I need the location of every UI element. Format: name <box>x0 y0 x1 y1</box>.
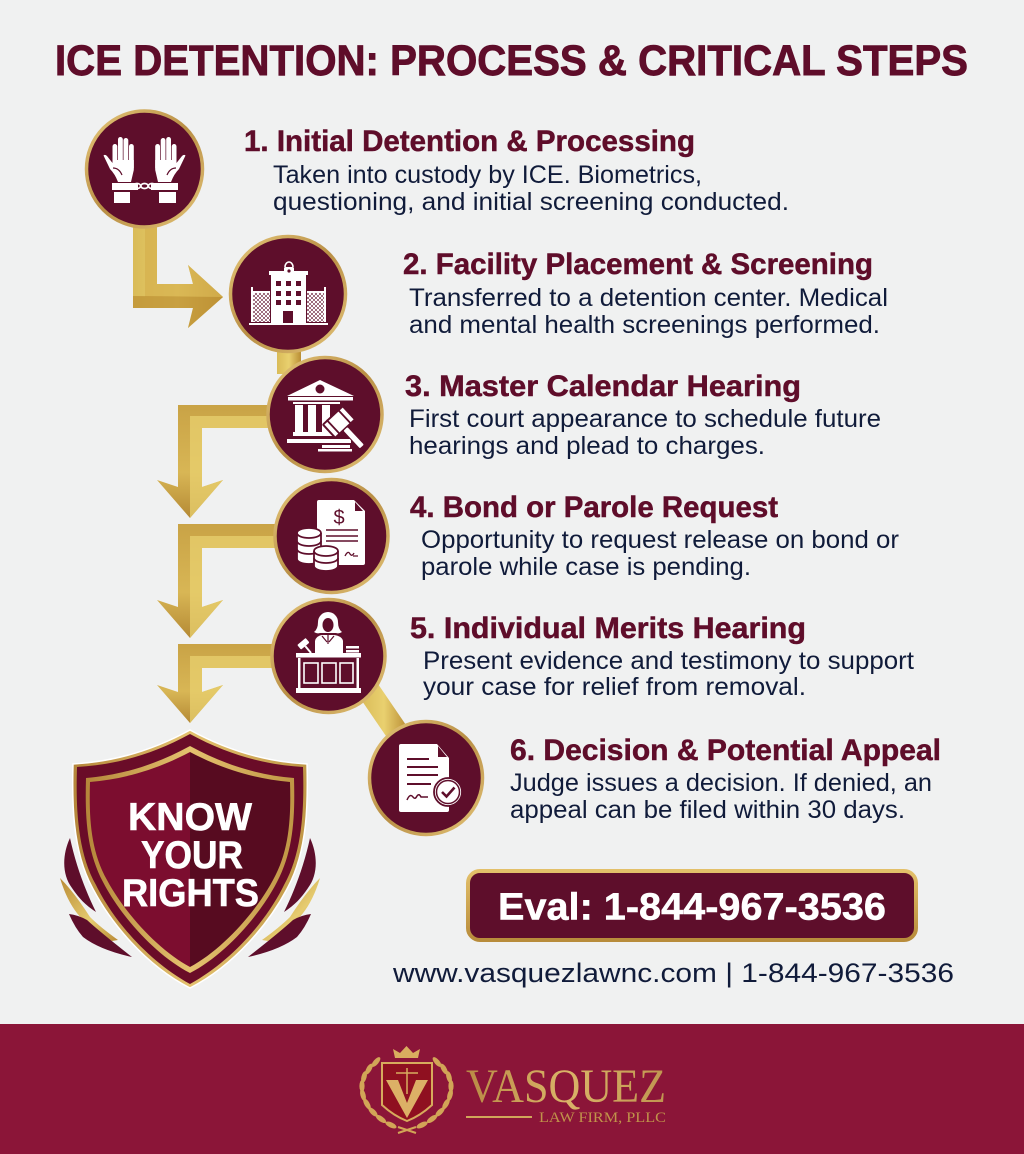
shield text: RIGHTS <box>122 872 259 915</box>
text: step 1 description: questioning, and initial screening conducted. <box>273 188 789 216</box>
shield: know your rights <box>60 730 320 988</box>
icon: judge at bench <box>272 600 385 712</box>
icon: detention facility <box>230 236 346 352</box>
logo: crest <box>359 1046 454 1133</box>
logo: wordmark: LAW FIRM, PLLC <box>539 1110 666 1126</box>
text: step 3 description: hearings and plead to charges. <box>409 432 765 460</box>
step 4 <box>275 480 899 592</box>
shield text: KNOW <box>128 796 252 839</box>
arrow: step 1 to step 2 <box>133 225 223 328</box>
step 3 <box>268 358 881 472</box>
connector: step 2 to step 3 <box>277 348 301 374</box>
icon: bond document and coins: $ <box>333 507 345 529</box>
icon: bond document and coins <box>275 480 388 592</box>
text: step 4 description: Opportunity to request release on bond or <box>421 526 899 554</box>
phone button: Eval: 1-844-967-3536 <box>498 886 886 928</box>
step 2 <box>230 236 888 352</box>
text: step 5 description <box>423 647 914 701</box>
step 6 <box>370 722 941 834</box>
arrow: step 3 branch <box>157 405 272 518</box>
step 5 <box>272 600 914 712</box>
text: step 3 description <box>409 405 881 460</box>
shield text: YOUR <box>141 834 243 877</box>
icon: raised cuffed hands <box>86 111 202 227</box>
icon: courthouse and gavel <box>268 358 382 472</box>
text: step 6 description <box>510 769 932 824</box>
text: step 1 description <box>273 161 789 216</box>
heading: step 3: 3. Master Calendar Hearing <box>405 370 801 403</box>
text: step 5 description: your case for relief from removal. <box>423 673 806 701</box>
arrow: step 4 branch <box>157 524 278 638</box>
heading: step 6: 6. Decision & Potential Appeal <box>510 734 941 767</box>
step 1 <box>86 111 789 227</box>
shield text <box>122 796 259 915</box>
text: step 3 description: First court appearance to schedule future <box>409 405 881 433</box>
text: step 2 description: Transferred to a detention center. Medical <box>409 284 888 312</box>
website and phone line: www.vasquezlawnc.com | 1-844-967-3536 <box>392 958 954 988</box>
text: step 2 description: and mental health screenings performed. <box>409 311 880 339</box>
wings behind shield <box>60 838 320 957</box>
text: step 1 description: Taken into custody by ICE. Biometrics, <box>273 161 702 189</box>
text: step 6 description: appeal can be filed within 30 days. <box>510 796 905 824</box>
phone button <box>468 871 916 940</box>
arrow: step 5 branch <box>157 644 276 723</box>
text: step 4 description <box>421 526 899 581</box>
heading: step 5: 5. Individual Merits Hearing <box>410 612 806 645</box>
text: step 6 description: Judge issues a decision. If denied, an <box>510 769 932 797</box>
text: step 2 description <box>409 284 888 339</box>
title: ICE DETENTION: PROCESS & CRITICAL STEPS <box>55 37 968 85</box>
connector: step 5 to step 6 <box>360 684 408 742</box>
logo: wordmark: VASQUEZ <box>466 1060 666 1113</box>
text: step 4 description: parole while case is pending. <box>421 553 751 581</box>
heading: step 2: 2. Facility Placement & Screening <box>403 248 873 281</box>
footer band <box>0 1024 1024 1154</box>
icon: signed document with check <box>370 722 482 834</box>
heading: step 1: 1. Initial Detention & Processing <box>244 125 695 158</box>
heading: step 4: 4. Bond or Parole Request <box>410 491 778 524</box>
text: step 5 description: Present evidence and testimony to support <box>423 647 914 675</box>
